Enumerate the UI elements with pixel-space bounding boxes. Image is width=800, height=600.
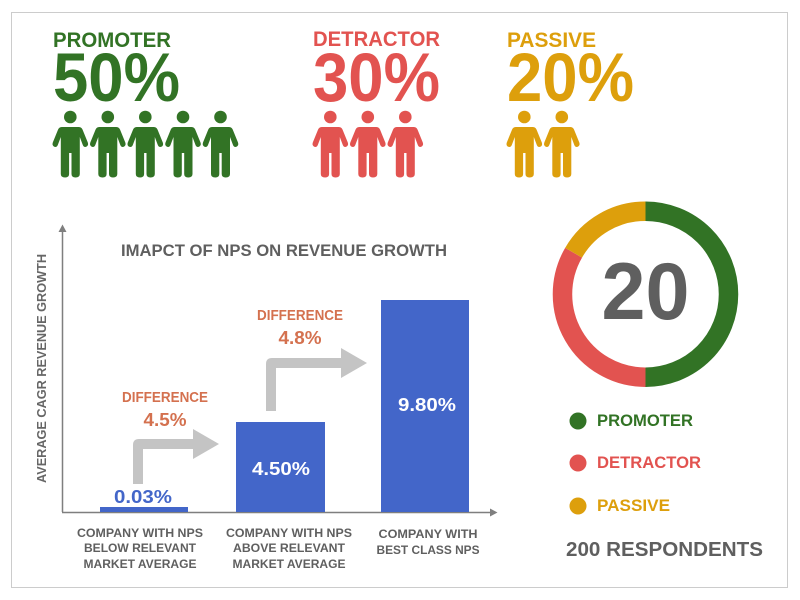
category label 1: BELOW RELEVANT xyxy=(84,541,197,555)
detractor people icons xyxy=(313,111,423,178)
promoter percent: 50% xyxy=(53,39,180,116)
passive people icons xyxy=(507,111,580,178)
respondents: 200 RESPONDENTS xyxy=(566,538,763,561)
y axis arrowhead xyxy=(58,224,66,232)
passive percent: 20% xyxy=(507,39,634,116)
difference 2: 4.8% xyxy=(278,327,322,348)
bar 3 xyxy=(381,300,469,512)
legend xyxy=(570,412,701,515)
y axis label: AVERAGE CAGR REVENUE GROWTH xyxy=(34,254,49,483)
category label 2 xyxy=(226,526,352,571)
detractor label: DETRACTOR xyxy=(313,27,440,51)
category label 3 xyxy=(376,527,480,557)
difference 2 xyxy=(257,308,343,348)
category label 1: COMPANY WITH NPS xyxy=(77,526,203,540)
bar 2 value: 4.50% xyxy=(252,458,310,479)
category label 3: BEST CLASS NPS xyxy=(376,543,480,557)
chart: revenue growth xyxy=(34,224,498,571)
difference 1: 4.5% xyxy=(144,409,186,430)
promoter segment xyxy=(646,211,728,377)
detractor stat xyxy=(313,27,440,178)
score: 20 xyxy=(602,247,690,337)
bar 2 xyxy=(236,422,325,512)
passive segment xyxy=(574,211,646,253)
passive label: PASSIVE xyxy=(507,28,596,52)
category label 1: MARKET AVERAGE xyxy=(84,557,196,571)
promoter stat xyxy=(53,28,238,178)
detractor percent: 30% xyxy=(313,39,440,116)
category label 3: COMPANY WITH xyxy=(378,527,478,541)
bar 1 xyxy=(100,507,188,512)
difference 1 xyxy=(122,390,208,430)
x axis arrowhead xyxy=(490,508,498,516)
donut chart xyxy=(562,211,728,377)
difference 1: DIFFERENCE xyxy=(122,390,208,406)
y axis xyxy=(62,230,64,512)
category label 2: COMPANY WITH NPS xyxy=(226,526,352,540)
difference 2: DIFFERENCE xyxy=(257,308,343,324)
chart title: IMAPCT OF NPS ON REVENUE GROWTH xyxy=(121,242,447,260)
category label 2: MARKET AVERAGE xyxy=(232,557,346,571)
category label 2: ABOVE RELEVANT xyxy=(233,541,346,555)
promoter people icons xyxy=(53,111,238,178)
arrow 1 xyxy=(133,429,219,484)
legend passive: PASSIVE xyxy=(597,497,670,515)
bar 1 value: 0.03% xyxy=(114,486,172,507)
bar 3 value: 9.80% xyxy=(398,394,456,415)
category label 1 xyxy=(77,526,203,571)
arrow 2 xyxy=(266,348,367,411)
passive stat xyxy=(507,28,634,178)
legend promoter: PROMOTER xyxy=(597,412,693,430)
legend detractor: DETRACTOR xyxy=(597,454,701,472)
detractor segment xyxy=(562,253,646,377)
promoter label: PROMOTER xyxy=(53,28,171,52)
x axis xyxy=(62,512,491,514)
